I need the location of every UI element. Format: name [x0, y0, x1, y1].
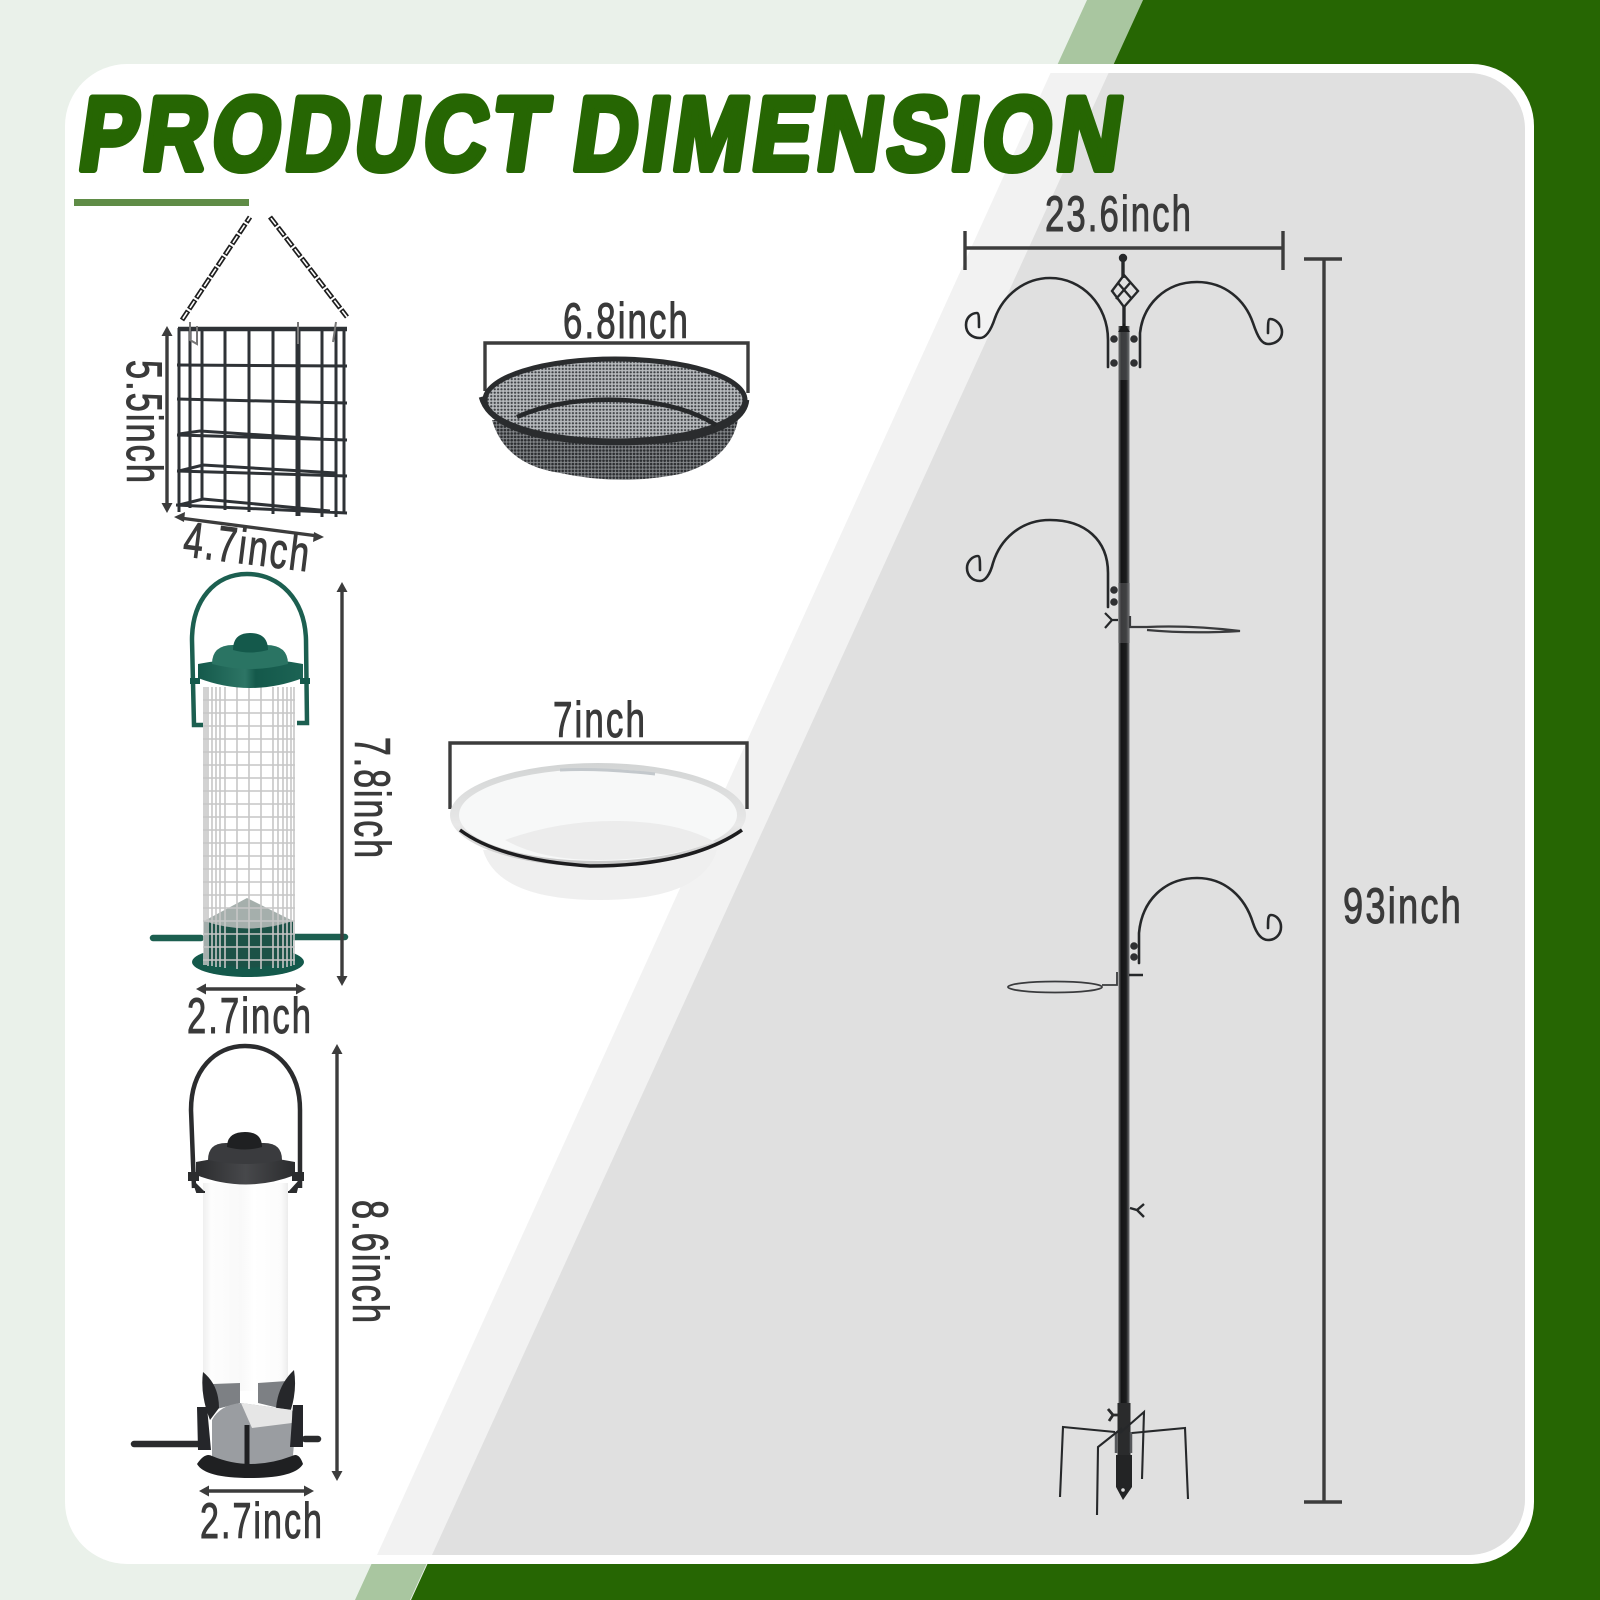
lower wing nut [1129, 974, 1143, 976]
title: PRODUCT [73, 76, 561, 192]
dimension label: 7.8inch: 7.8inch [344, 737, 400, 860]
title: DIMENSION [567, 76, 1136, 192]
title underline [74, 199, 249, 206]
perches [134, 1439, 318, 1444]
dimension label: 6.8inch: 6.8inch [563, 293, 690, 349]
lid dome [208, 1143, 282, 1164]
dimension bracket: pole width [965, 231, 1283, 270]
pole assembly group [965, 186, 1463, 1515]
tray rim and interior [485, 359, 745, 441]
lid dome [212, 645, 288, 669]
middle left hook [967, 520, 1108, 607]
pole upper sleeve [1119, 332, 1129, 380]
ground stakes [1060, 1412, 1188, 1515]
port blocks [213, 1381, 287, 1410]
finial [1112, 255, 1138, 325]
base sleeve [1118, 1403, 1130, 1455]
outer ring [481, 397, 747, 443]
background: dark green corner [411, 0, 1600, 1600]
dimension label: 2.7inch: 2.7inch [200, 1493, 324, 1549]
feeder base [197, 1455, 303, 1478]
top left hook [966, 278, 1108, 367]
middle hook bolts [1110, 586, 1118, 606]
dimension arrow: cage height [162, 326, 172, 513]
lower hook bolts [1130, 942, 1138, 961]
green mesh feeder group [153, 574, 400, 1044]
feeder perches [153, 937, 345, 938]
icon: black feeder [134, 1046, 318, 1478]
base wing nut [1108, 1409, 1119, 1421]
tray rim [450, 763, 746, 867]
pole top cap [1118, 323, 1130, 332]
dimension label: 2.7inch: 2.7inch [187, 988, 313, 1044]
lower wing nut on pole [1130, 1204, 1144, 1217]
ground spike [1116, 1455, 1132, 1500]
suet cage feeder group [116, 217, 347, 583]
mesh tray group [481, 293, 748, 480]
icon: mesh tray [481, 359, 747, 480]
feeder base [192, 947, 304, 977]
tray body [492, 420, 738, 480]
background: light green diagonal band [355, 0, 1143, 1600]
icon: shepherd hook pole [966, 255, 1282, 1515]
handle clips [189, 1173, 303, 1192]
seed tray [204, 921, 293, 968]
dimension label: 93inch: 93inch [1343, 878, 1463, 934]
black tube feeder group [134, 1044, 398, 1549]
tray back shadow [560, 770, 655, 774]
base bracket [1116, 1432, 1131, 1453]
feeder lid [198, 659, 303, 688]
tray interior [459, 769, 737, 861]
dimension arrow: black feeder width [199, 1486, 314, 1496]
icon: wire cage [176, 322, 347, 517]
black rim edge [460, 830, 742, 866]
icon: hanging chain [182, 217, 347, 320]
title [73, 76, 1136, 192]
clear tube [203, 1183, 288, 1391]
tray floor edge [517, 400, 716, 425]
side grips [197, 1405, 303, 1450]
dimension arrow: black feeder height [332, 1044, 342, 1481]
seed cup [212, 1403, 294, 1465]
plastic tray group [450, 692, 747, 900]
seed tray top [204, 898, 293, 928]
top hook bolts [1110, 335, 1138, 367]
icon: green feeder [153, 574, 345, 977]
dimension label: 5.5inch: 5.5inch [116, 360, 172, 485]
lid knob [227, 1132, 262, 1150]
lower tray ring [1008, 972, 1117, 992]
feeder lid [196, 1157, 295, 1184]
feeder handle [191, 1046, 300, 1188]
dimension bracket: pole height [1304, 259, 1342, 1502]
wire mesh tube [203, 687, 295, 969]
dimension bracket: mesh tray width [485, 343, 748, 393]
dimension arrow: green feeder height [336, 582, 348, 986]
dimension bracket: plastic tray width [450, 743, 747, 809]
dimension label: 23.6inch: 23.6inch [1045, 186, 1193, 242]
dimension label: 7inch: 7inch [553, 692, 647, 748]
dimension arrow: green feeder width [196, 984, 306, 994]
middle wing nut [1105, 613, 1118, 628]
handle clips [190, 678, 310, 684]
lid knob [233, 633, 268, 652]
middle tray ring [1130, 616, 1240, 632]
dimension arrow: cage width [174, 512, 324, 542]
panel: grey diagonal area [432, 72, 1525, 1555]
panel: light grey diagonal band [377, 73, 1108, 1555]
tray floor [505, 821, 715, 860]
dimension label: 8.6inch: 8.6inch [342, 1200, 398, 1325]
feeder handle [192, 574, 307, 725]
port guards [202, 1370, 295, 1420]
pole mid sleeve [1118, 583, 1130, 643]
icon: plastic tray [450, 763, 746, 900]
tray body [483, 850, 717, 900]
main pole [1118, 326, 1130, 1416]
top right hook [1140, 282, 1282, 367]
dimension label: 4.7inch: 4.7inch [181, 511, 315, 583]
lower right hook [1139, 878, 1281, 963]
